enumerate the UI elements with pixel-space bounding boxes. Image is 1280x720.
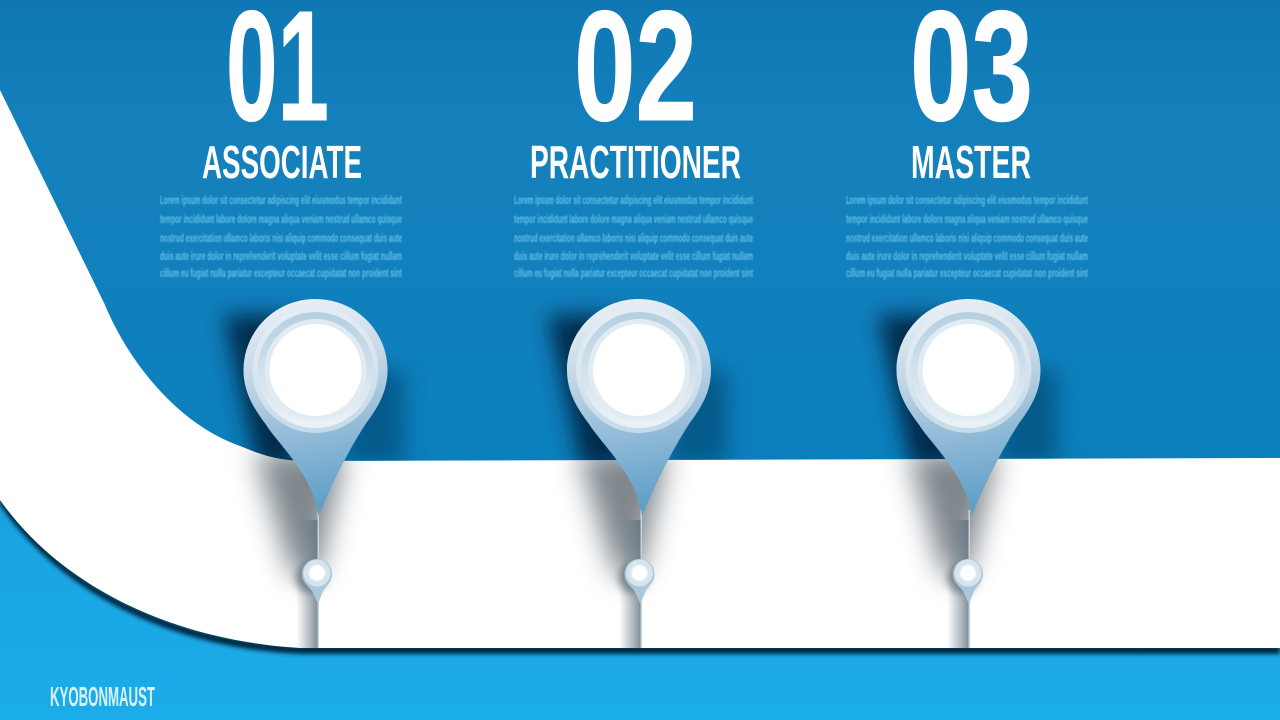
lower light blue band — [0, 440, 1280, 720]
pin shadows on white — [255, 452, 998, 648]
body text — [160, 193, 402, 280]
body text — [846, 193, 1088, 280]
body text: Lorem ipsum dolor sit consectetur adipiscing elit eiusmodus tempor incididunt — [514, 193, 753, 207]
heading: associate: ASSOCIATE — [202, 136, 362, 188]
pin shadows on blue — [224, 315, 1058, 470]
icon: location pin 3 — [896, 299, 1040, 648]
body text: duis aute irure dolor in reprehenderit voluptate velit esse cillum fugiat nullam — [160, 249, 402, 263]
body text: tempor incididunt labore dolore magna aliqua veniam nostrud ullamco quisque — [514, 212, 753, 226]
body text: cillum eu fugiat nulla pariatur excepteur occaecat cupidatat non proident sint — [514, 266, 753, 280]
heading: practitioner: PRACTITIONER — [530, 136, 741, 188]
body text: cillum eu fugiat nulla pariatur excepteur occaecat cupidatat non proident sint — [846, 266, 1088, 280]
body text: duis aute irure dolor in reprehenderit voluptate velit esse cillum fugiat nullam — [846, 249, 1088, 263]
body text: Lorem ipsum dolor sit consectetur adipiscing elit eiusmodus tempor incididunt — [160, 193, 402, 207]
body text: cillum eu fugiat nulla pariatur excepteur occaecat cupidatat non proident sint — [160, 266, 402, 280]
body text: nostrud exercitation ullamco laboris nisi aliquip commodo consequat duis aute — [160, 231, 402, 245]
swoosh bottom shadow — [0, 495, 1280, 654]
text: KYOBONMAUST — [50, 681, 155, 712]
body text: tempor incididunt labore dolore magna aliqua veniam nostrud ullamco quisque — [160, 212, 402, 226]
icon: location pin 2 — [567, 299, 711, 648]
upper dark blue panel — [0, 0, 1280, 470]
body text: nostrud exercitation ullamco laboris nisi aliquip commodo consequat duis aute — [514, 231, 753, 245]
body text: duis aute irure dolor in reprehenderit voluptate velit esse cillum fugiat nullam — [514, 249, 753, 263]
white swoosh panel — [0, 90, 1280, 654]
column 3: master — [846, 0, 1088, 280]
column 1: associate — [160, 0, 402, 280]
body text — [514, 193, 753, 280]
icon: location pin 1 — [244, 299, 388, 648]
heading: master: MASTER — [911, 136, 1031, 188]
column 2: practitioner — [514, 0, 753, 280]
